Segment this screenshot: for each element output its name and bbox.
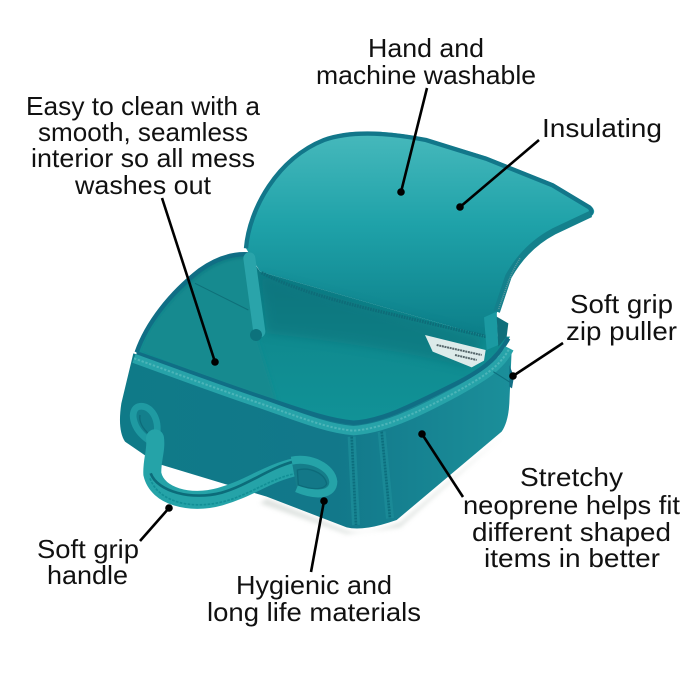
callout: soft grip zip puller: Soft grip — [570, 289, 673, 319]
callout: insulating: Insulating — [542, 113, 662, 143]
rim zip dark line — [137, 338, 508, 423]
left interior panel — [140, 257, 277, 402]
callout: soft grip zip puller — [509, 289, 677, 380]
back zip seam — [262, 273, 487, 337]
callout: stretchy neoprene: Stretchy — [520, 462, 623, 492]
callout: easy to clean: Easy to clean with a — [26, 91, 261, 121]
hinge strap — [249, 258, 259, 332]
lid right zip — [497, 214, 591, 312]
callout: hand and machine washable: machine washable — [316, 60, 536, 90]
callout: soft grip zip puller: zip puller — [566, 316, 677, 346]
left handle loop — [133, 406, 157, 442]
callout: soft grip handle: handle — [47, 560, 128, 590]
bag body — [120, 350, 512, 529]
callout: easy to clean — [26, 91, 261, 366]
callout: stretchy neoprene — [418, 430, 681, 573]
right handle loop — [292, 460, 333, 493]
callout: hand and machine washable — [316, 33, 536, 196]
callout: stretchy neoprene: different shaped — [472, 517, 671, 547]
lid zip edge — [246, 134, 591, 248]
callout: easy to clean: interior so all mess — [31, 143, 255, 173]
ground shadow — [260, 435, 503, 534]
lid — [245, 131, 594, 337]
corner seams — [352, 432, 390, 525]
rim piping — [134, 348, 509, 431]
care label — [425, 335, 486, 367]
rim stitching — [134, 348, 509, 431]
callout: hygienic materials — [207, 497, 421, 627]
interior shadow — [262, 277, 483, 367]
callout: stretchy neoprene: items in better — [484, 543, 660, 573]
zip puller — [484, 312, 498, 350]
lunch bag illustration — [120, 131, 594, 534]
callout: soft grip handle: Soft grip — [37, 534, 139, 564]
side fold and tab — [493, 372, 512, 383]
callout: stretchy neoprene: neoprene helps fit — [463, 490, 681, 520]
callout: hygienic materials: long life materials — [207, 597, 421, 627]
back-left rim zip — [137, 254, 248, 352]
callout: insulating — [456, 113, 662, 211]
interior crease — [195, 283, 248, 310]
callout: hygienic materials: Hygienic and — [236, 570, 392, 600]
callout: soft grip handle — [37, 504, 173, 590]
callout: hand and machine washable: Hand and — [368, 33, 484, 63]
handle — [150, 438, 297, 505]
callout: easy to clean: washes out — [74, 170, 212, 200]
bag interior floor — [136, 254, 510, 423]
callout: easy to clean: smooth, seamless — [38, 117, 248, 147]
